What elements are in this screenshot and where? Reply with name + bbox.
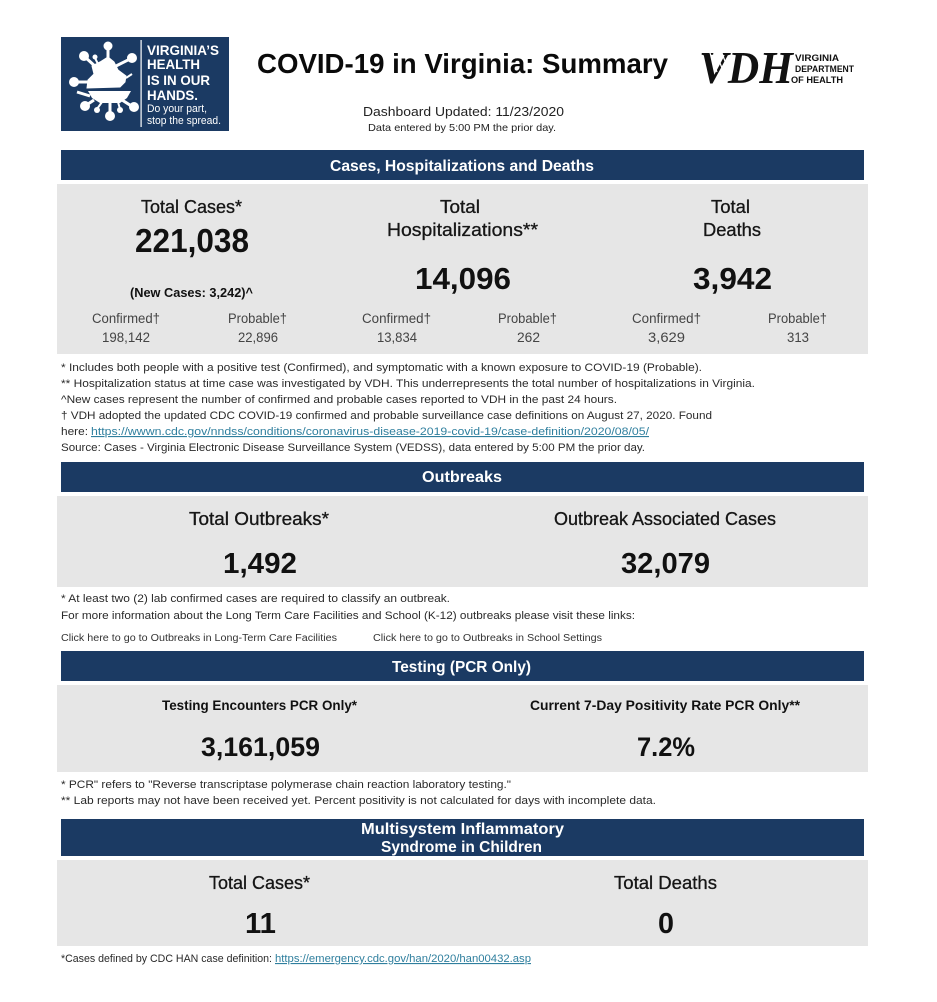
panel: multisystem inflammatory syndrome in children	[57, 860, 868, 946]
footnotes: cases: † VDH adopted the updated CDC COVID-19 confirmed and probable surveillance case definitions on August 27, 2020. Found	[61, 410, 712, 422]
footnotes: testing: ** Lab reports may not have been received yet. Percent positivity is not calculated for days with incomplete data.	[61, 795, 656, 807]
total hospitalizations: 14,096	[415, 261, 511, 296]
title: COVID-19 in Virginia: Summary	[257, 48, 668, 79]
footnotes: outbreaks: * At least two (2) lab confirmed cases are required to classify an outbreak.	[61, 593, 450, 605]
panel: outbreaks	[57, 496, 868, 587]
positivity rate: 7.2%	[637, 732, 695, 762]
positivity rate	[530, 698, 801, 762]
total cases: 198,142	[102, 330, 150, 345]
total cases: Confirmed†	[92, 311, 160, 326]
footnotes: cases: Source: Cases - Virginia Electronic Disease Surveillance System (VEDSS), data entered by 5:00 PM the prior day.	[61, 442, 645, 454]
logo: Virginia's Health Is In Our Hands: HANDS.	[147, 87, 198, 103]
logo: VDH Virginia Department of Health: DEPARTMENT	[795, 64, 854, 74]
panel: cases, hospitalizations and deaths	[57, 184, 868, 354]
panel: testing	[57, 685, 868, 772]
total hospitalizations: 262	[517, 330, 540, 345]
testing encounters	[162, 698, 358, 762]
total hospitalizations: Probable†	[498, 311, 557, 326]
icon: virus over Virginia map	[69, 42, 139, 121]
data entry note: Data entered by 5:00 PM the prior day.	[368, 122, 556, 134]
footnotes: cases: * Includes both people with a positive test (Confirmed), and symptomatic with a known exposure to COVID-19 (Probable).	[61, 362, 702, 374]
footnote: case definition: *Cases defined by CDC HAN case definition:	[61, 953, 272, 965]
total outbreaks: Total Outbreaks*	[189, 509, 329, 529]
footnotes: outbreaks	[61, 593, 635, 644]
total deaths: Probable†	[768, 311, 827, 326]
MIS-C total deaths: 0	[658, 908, 674, 940]
footnotes: cases: ^New cases represent the number of confirmed and probable cases reported to VDH in the past 24 hours.	[61, 394, 617, 406]
logo: Virginia's Health Is In Our Hands: IS IN OUR	[147, 72, 210, 88]
section banner: multisystem inflammatory syndrome in children: Multisystem Inflammatory	[361, 821, 564, 838]
footnotes: outbreaks: For more information about the Long Term Care Facilities and School (K-12) outbreaks please visit these links:	[61, 610, 635, 622]
total hospitalizations: Hospitalizations**	[387, 220, 538, 240]
total deaths: 313	[787, 330, 809, 345]
logo: VDH Virginia Department of Health: VDH	[699, 42, 794, 93]
footnote: case definition	[61, 953, 531, 965]
total deaths: 3,942	[693, 261, 772, 296]
MIS-C total deaths	[614, 873, 717, 940]
section banner: cases, hospitalizations and deaths	[61, 150, 864, 180]
footnotes: cases: here:	[61, 426, 88, 438]
total outbreaks	[189, 509, 329, 580]
total deaths	[632, 197, 827, 345]
footnotes: outbreaks: Click here to go to Outbreaks in Long-Term Care Facilities	[61, 633, 337, 644]
total cases: 22,896	[238, 330, 278, 345]
footnote: case definition: https://emergency.cdc.gov/han/2020/han00432.asp	[275, 953, 531, 965]
section banner: multisystem inflammatory syndrome in children	[61, 819, 864, 856]
logo: VDH Virginia Department of Health	[699, 42, 854, 93]
total cases	[92, 197, 287, 345]
MIS-C total cases: Total Cases*	[209, 873, 310, 893]
section banner: multisystem inflammatory syndrome in children: Syndrome in Children	[381, 839, 542, 856]
logo: Virginia's Health Is In Our Hands: stop the spread.	[147, 115, 221, 127]
logo: VDH Virginia Department of Health: OF HEALTH	[791, 75, 843, 85]
outbreak associated cases: 32,079	[621, 548, 710, 580]
total hospitalizations: Total	[440, 197, 480, 217]
footnotes: testing	[61, 779, 656, 807]
logo: Virginia's Health Is In Our Hands: Do your part,	[147, 103, 207, 115]
section banner: testing	[61, 651, 864, 681]
logo: VDH Virginia Department of Health: VIRGINIA	[795, 53, 840, 63]
footnotes: cases: ** Hospitalization status at time case was investigated by VDH. This underrepresents the total number of hospitalizations in Virginia.	[61, 378, 755, 390]
footnotes: cases: https://wwwn.cdc.gov/nndss/conditions/coronavirus-disease-2019-covid-19/case-definition/2020/08/05/	[91, 426, 650, 438]
MIS-C total cases: 11	[245, 908, 276, 940]
total hospitalizations	[362, 197, 557, 345]
section banner: testing: Testing (PCR Only)	[392, 659, 531, 676]
logo: Virginia's Health Is In Our Hands: HEALTH	[147, 56, 200, 72]
section banner: outbreaks: Outbreaks	[422, 469, 502, 486]
dashboard update date: Dashboard Updated: 11/23/2020	[363, 104, 564, 119]
footnotes: testing: * PCR" refers to "Reverse transcriptase polymerase chain reaction laboratory testing."	[61, 779, 511, 791]
total outbreaks: 1,492	[223, 548, 297, 580]
footnotes: outbreaks: Click here to go to Outbreaks in School Settings	[373, 633, 602, 644]
MIS-C total cases	[209, 873, 310, 940]
testing encounters: Testing Encounters PCR Only*	[162, 698, 358, 713]
section banner: cases, hospitalizations and deaths: Cases, Hospitalizations and Deaths	[330, 158, 594, 175]
total deaths: Confirmed†	[632, 311, 701, 326]
total cases: 221,038	[135, 222, 249, 259]
section banner: outbreaks	[61, 462, 864, 492]
total hospitalizations: Confirmed†	[362, 311, 431, 326]
total deaths: Deaths	[703, 220, 761, 240]
total cases: (New Cases: 3,242)^	[130, 286, 254, 300]
testing encounters: 3,161,059	[201, 732, 320, 762]
MIS-C total deaths: Total Deaths	[614, 873, 717, 893]
logo: Virginia's Health Is In Our Hands: VIRGINIA’S	[147, 42, 219, 58]
outbreak associated cases	[554, 509, 776, 580]
total deaths: Total	[711, 197, 750, 217]
total cases: Probable†	[228, 311, 287, 326]
total deaths: 3,629	[648, 330, 685, 345]
footnotes: cases	[61, 362, 755, 454]
logo: Virginia's Health Is In Our Hands	[61, 37, 229, 131]
outbreak associated cases: Outbreak Associated Cases	[554, 509, 776, 529]
positivity rate: Current 7-Day Positivity Rate PCR Only**	[530, 698, 801, 713]
total hospitalizations: 13,834	[377, 330, 417, 345]
total cases: Total Cases*	[141, 197, 242, 217]
